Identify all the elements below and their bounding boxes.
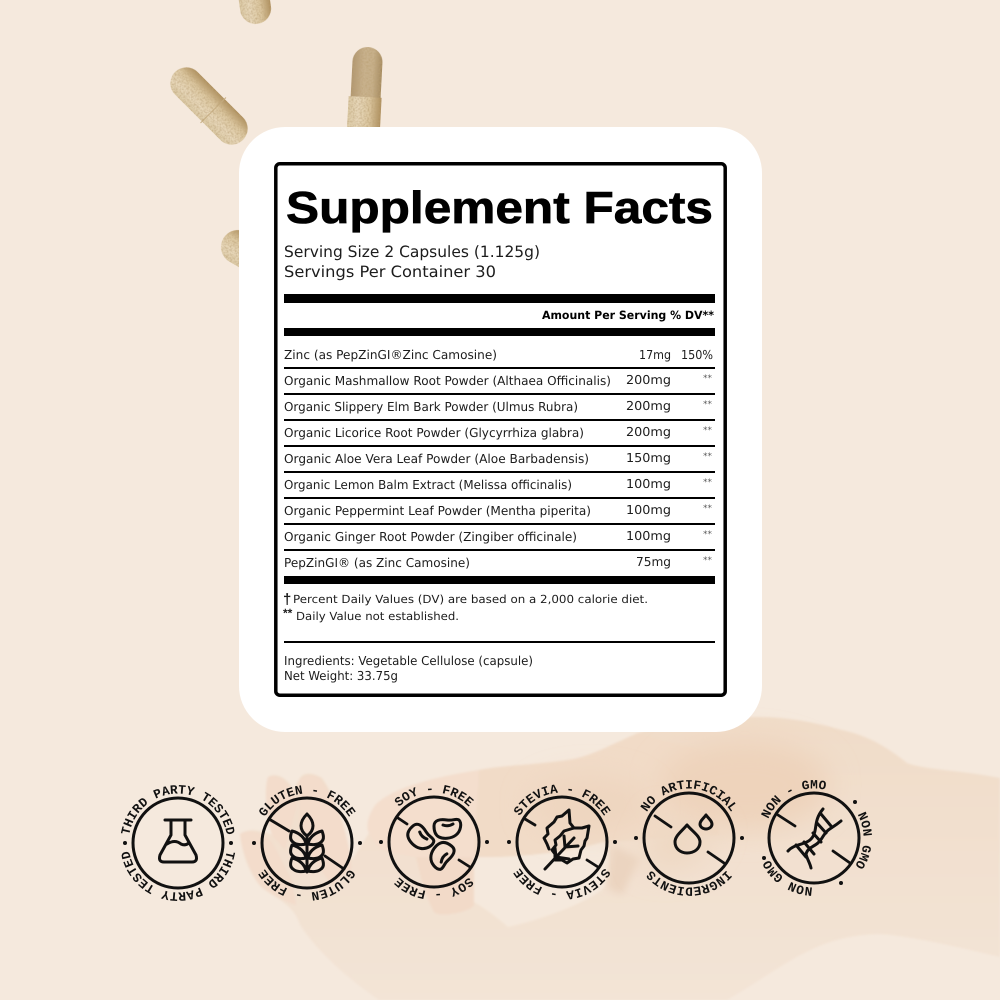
badge: no artificial ingredients: NO ARTIFICIAL [640,780,736,812]
capsule top [235,0,273,26]
capsule left [162,59,256,153]
icon: flask [160,820,196,862]
badge: soy free [379,785,489,899]
nutrient table: 150mg [626,451,671,465]
nutrient table: 100mg [626,529,671,543]
badge: stevia free [507,784,617,900]
icon: wheat [291,814,323,872]
nutrient table: PepZinGI® (as Zinc Camosine) [284,556,470,570]
nutrient table: ** [703,426,712,436]
nutrient table: 100mg [626,477,671,491]
footnotes: † [283,591,291,608]
badge: gluten free [252,785,362,901]
icon: drops [675,815,712,853]
capsule right [347,46,384,138]
badge: third party tested [120,785,236,901]
header bars [284,294,715,336]
icon: stevia leaf [544,810,589,869]
nutrient table: ** [703,478,712,488]
white card [239,127,762,732]
hand photo [240,717,1000,1000]
supplement facts panel [276,164,725,695]
footnotes [283,591,648,623]
footnotes: ** [283,606,293,620]
nutrient table [284,348,715,584]
badge: stevia free: STEVIA - FREE [513,868,610,900]
capsule lower [215,224,292,288]
badge: no artificial ingredients [634,780,744,896]
nutrient table: Organic Peppermint Leaf Powder (Mentha piperita) [284,504,591,518]
nutrient table: ** [703,504,712,514]
nutrient table: Organic Slippery Elm Bark Powder (Ulmus Rubra) [284,400,578,414]
badge: stevia free: STEVIA - FREE [514,784,611,816]
nutrient table: ** [703,452,712,462]
badge: non gmo: NON - GMO [761,780,826,818]
nutrient table: 150% [681,348,713,362]
footnotes: Percent Daily Values (DV) are based on a 2,000 calorie diet. [293,593,648,606]
badge: gluten free: GLUTEN - FREE [258,869,355,901]
badge: non gmo [761,780,872,896]
nutrient table: 200mg [626,373,671,387]
ingredients [284,654,533,683]
badge: non gmo: NON GMO [856,812,872,869]
nutrient table: 200mg [626,425,671,439]
nutrient table: 100mg [626,503,671,517]
serving info: Servings Per Container 30 [284,263,496,281]
badge: third party tested: THIRD PARTY TESTED [122,852,236,901]
nutrient table: Organic Aloe Vera Leaf Powder (Aloe Barbadensis) [284,452,589,466]
ingredients: Ingredients: Vegetable Cellulose (capsule) [284,654,533,668]
footnotes: Daily Value not established. [296,610,459,623]
nutrient table: ** [703,556,712,566]
badge: gluten free: GLUTEN - FREE [259,785,356,817]
nutrient table: ** [703,400,712,410]
badge: soy free: SOY - FREE [394,878,474,899]
nutrient table: Zinc (as PepZinGI®Zinc Camosine) [284,348,497,362]
serving info: Serving Size 2 Capsules (1.125g) [284,243,540,261]
heading: Supplement Facts [286,182,713,233]
nutrient table: 17mg [639,348,671,362]
ingredients: Net Weight: 33.75g [284,669,398,683]
icon: beans [404,819,461,871]
amount header: Amount Per Serving % DV** [542,308,714,322]
nutrient table: 75mg [636,555,671,569]
nutrient table: Organic Mashmallow Root Powder (Althaea Officinalis) [284,374,611,388]
gap between fingers and palm [474,842,610,927]
nutrient table: Organic Ginger Root Powder (Zingiber officinale) [284,530,577,544]
badge: soy free: SOY - FREE [394,785,474,806]
divider [284,641,715,643]
nutrient table: 200mg [626,399,671,413]
badge: no artificial ingredients: INGREDIENTS [646,870,732,896]
nutrient table: Organic Lemon Balm Extract (Melissa officinalis) [284,478,572,492]
icon: dna [788,809,841,868]
serving info [284,243,540,281]
badge: non gmo: NON GMO [763,861,812,896]
badge: third party tested: THIRD PARTY TESTED [120,785,234,834]
nutrient table: ** [703,530,712,540]
nutrient table: Organic Licorice Root Powder (Glycyrrhiza glabra) [284,426,584,440]
nutrient table: ** [703,374,712,384]
